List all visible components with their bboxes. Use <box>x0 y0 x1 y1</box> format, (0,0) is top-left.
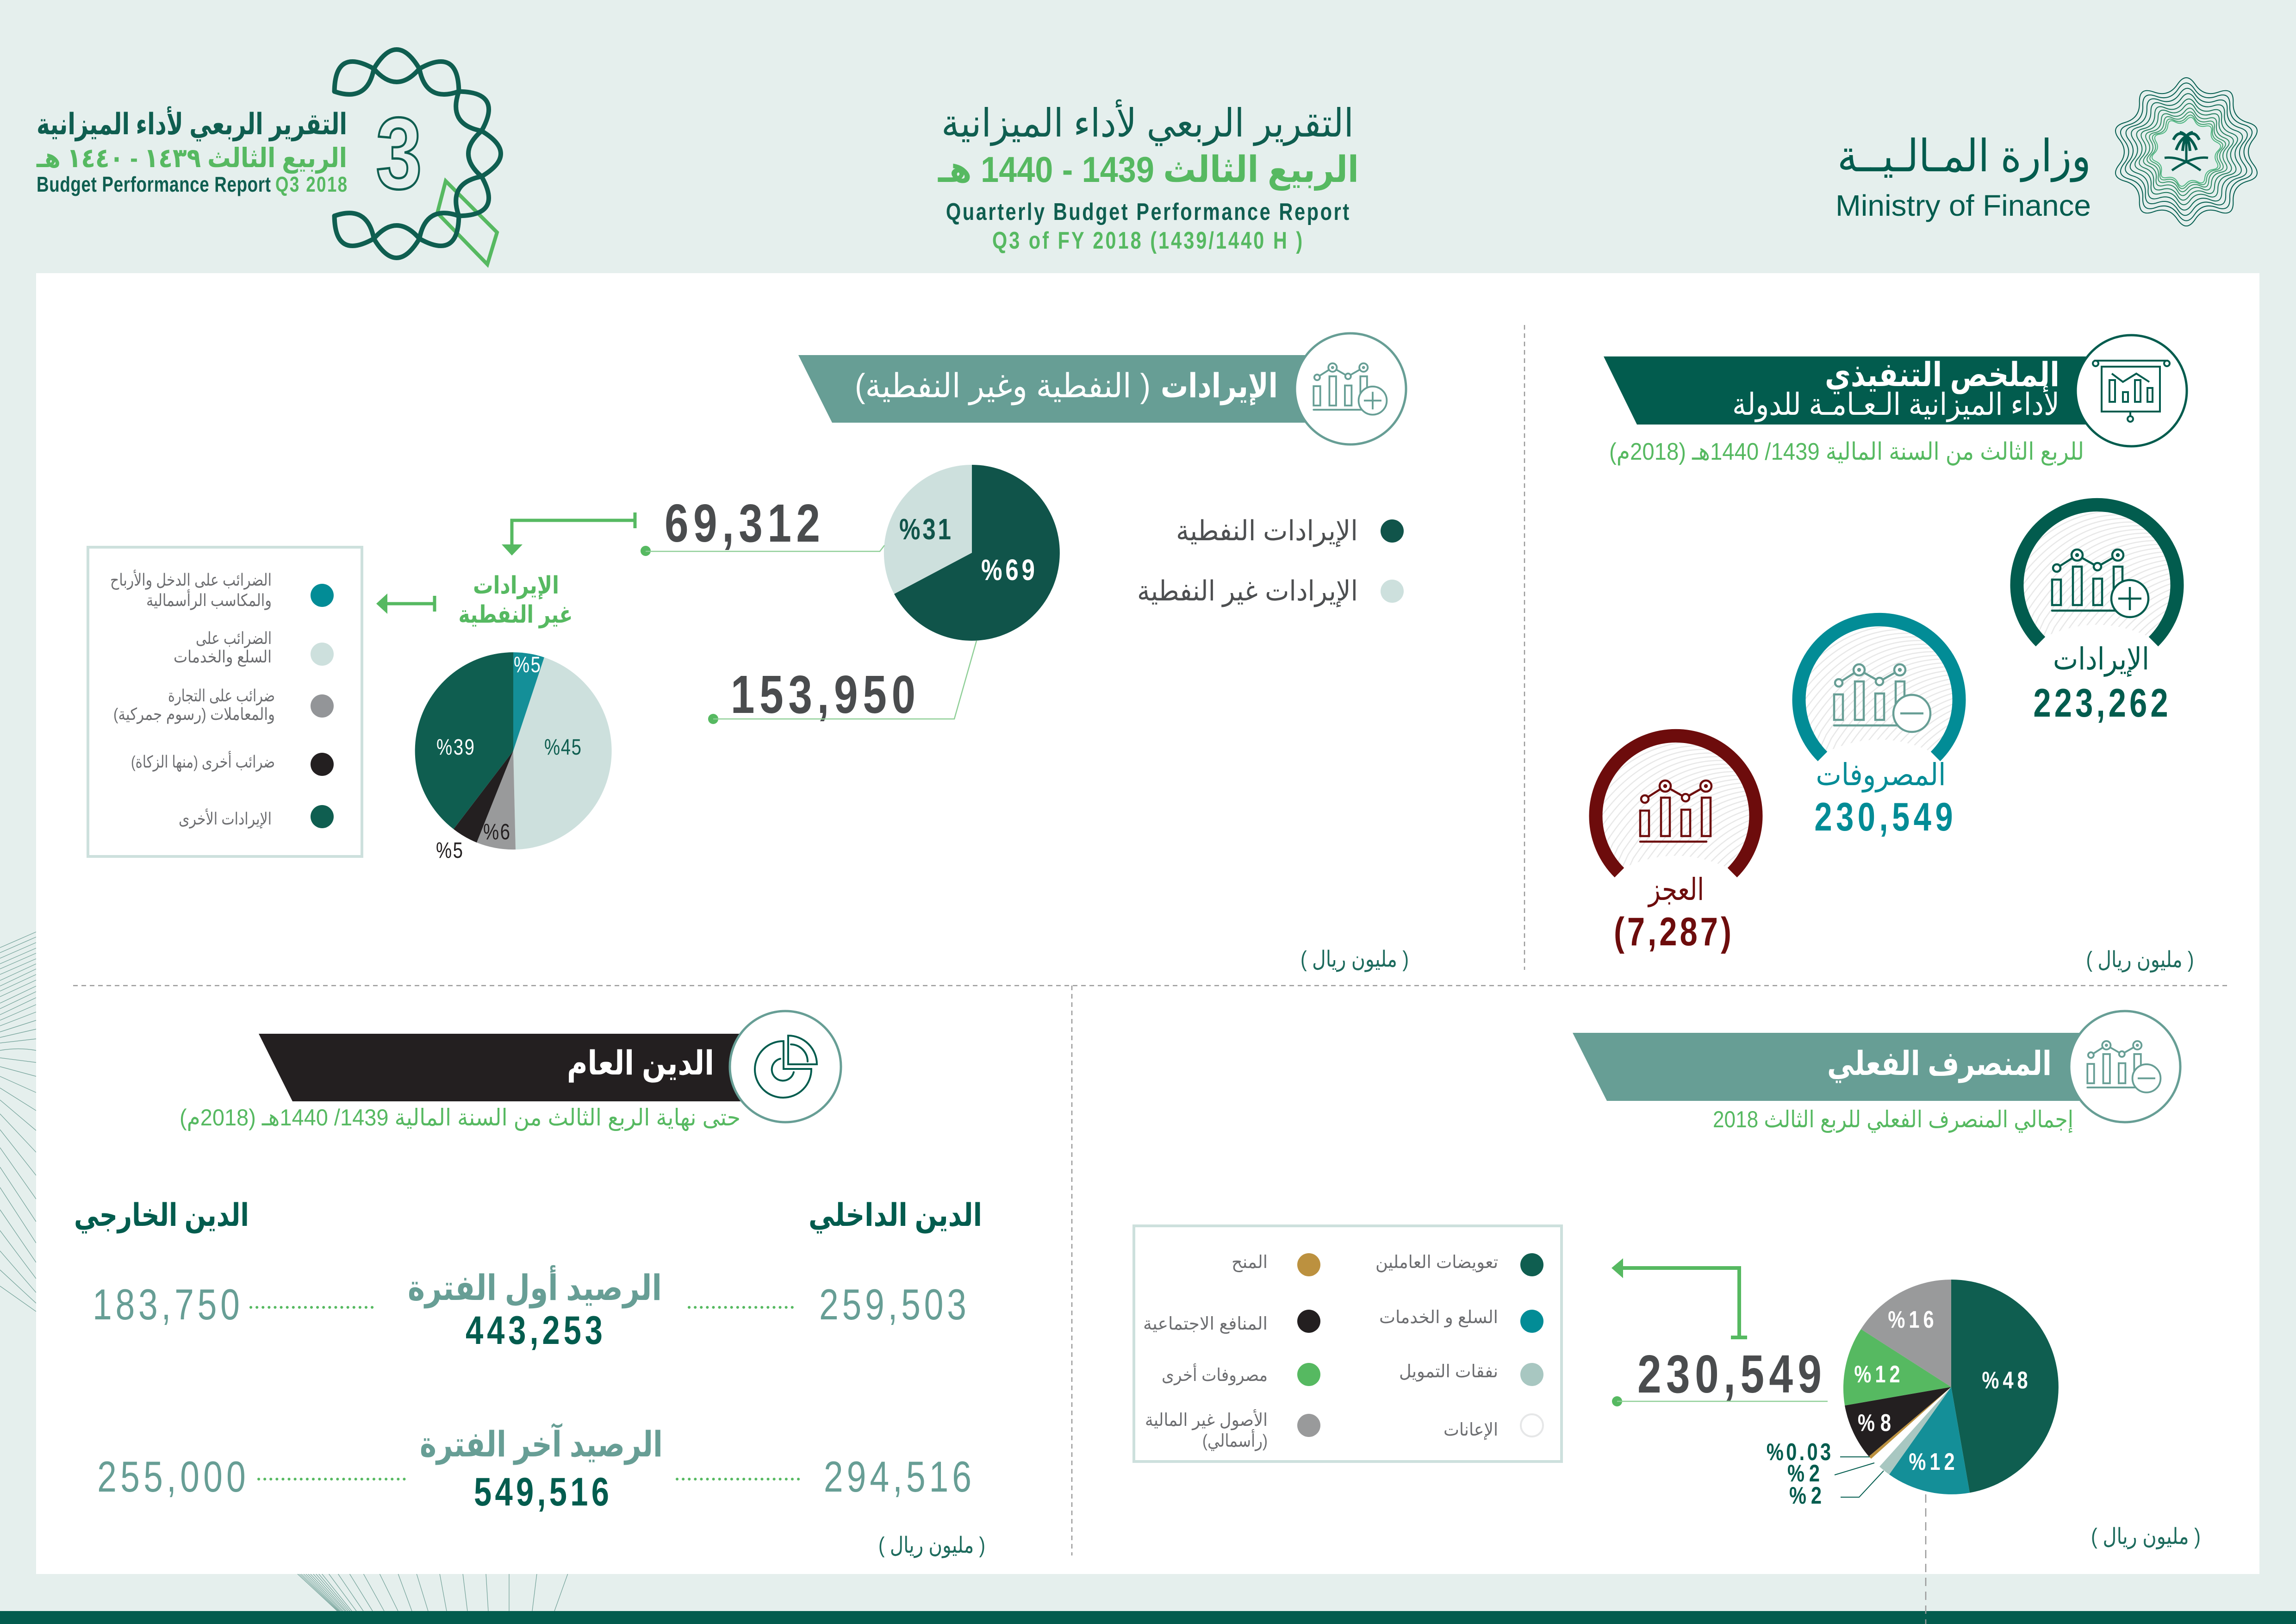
pie small-slice labels: %2 <box>1787 1460 1820 1487</box>
badge period: الربيع الثالث ١٤٣٩ - ١٤٤٠ هـ <box>36 143 347 174</box>
header band <box>1573 1033 2092 1101</box>
unit note: ( مليون ريال ) <box>2086 948 2194 973</box>
icon: deficit chart <box>1640 781 1711 842</box>
period arabic: الربيع الثالث 1439 - 1440 هـ <box>938 149 1359 191</box>
heading: non-oil revenues <box>458 572 573 629</box>
section title: الدين العام <box>567 1045 714 1083</box>
pie: expenditure breakdown: %16 <box>1888 1306 1934 1333</box>
callout: non-oil value <box>641 493 884 556</box>
icon: ministry emblem <box>2116 78 2257 226</box>
column heading: domestic debt: الدين الداخلي <box>809 1198 982 1234</box>
pie: non-oil breakdown: %39 <box>436 735 474 760</box>
icon: revenue chart plus <box>2052 550 2148 617</box>
section title: الإيرادات <box>1161 368 1278 406</box>
pie: non-oil breakdown: %6 <box>483 820 510 844</box>
gauge: expenditures: 230,549 <box>1814 795 1953 839</box>
legend: non-oil revenues: الإيرادات غير النفطية <box>1137 575 1358 607</box>
gauge: deficit: (7,287) <box>1614 910 1731 954</box>
badge english period: Q3 2018 <box>275 172 347 196</box>
panel: white content area <box>36 273 2259 1574</box>
ministry logo <box>1836 78 2257 226</box>
header band <box>798 355 1314 423</box>
gauge: deficit: العجز <box>1648 872 1704 907</box>
icon: expense chart <box>2069 1011 2180 1122</box>
period note: حتى نهاية الربع الثالث من السنة المالية 1439/ 1440هـ (2018م) <box>180 1105 740 1131</box>
section title: الملخص التنفيذي <box>1825 356 2060 394</box>
row: opening balance: 259,503 <box>819 1280 966 1329</box>
legend: expenditure categories: المنح <box>1232 1253 1268 1273</box>
icon: debt pie <box>730 1011 841 1122</box>
unit note: ( مليون ريال ) <box>2091 1524 2201 1549</box>
unit note: ( مليون ريال ) <box>1300 947 1409 972</box>
footer bar <box>0 1611 2296 1624</box>
gauge: revenues: الإيرادات <box>2053 642 2149 677</box>
pie: non-oil breakdown: %5 <box>436 838 463 863</box>
row: closing balance: 549,516 <box>474 1470 609 1514</box>
heading: non-oil revenues: غير النفطية <box>458 601 573 629</box>
legend: non-oil breakdown: ضرائب أخرى (منها الزكاة) <box>131 751 275 772</box>
section subtitle: لأداء الميزانية الـعـامـة للدولة <box>1732 385 2060 422</box>
row: closing balance: 255,000 <box>97 1453 246 1501</box>
icon: revenue chart <box>1295 333 1406 444</box>
row: closing balance: الرصيد آخر الفترة <box>420 1423 663 1465</box>
row: opening balance: 443,253 <box>466 1308 603 1353</box>
gauge: deficit <box>1589 729 1762 954</box>
legend: non-oil breakdown: السلع والخدمات <box>174 647 272 667</box>
unit note: ( مليون ريال ) <box>878 1533 985 1558</box>
legend: expenditure categories: الإعانات <box>1444 1420 1498 1440</box>
callout: oil value: 153,950 <box>731 665 915 725</box>
section subtitle: إجمالي المنصرف الفعلي للربع الثالث 2018 <box>1713 1106 2073 1133</box>
legend: expenditure categories: نفقات التمويل <box>1399 1362 1498 1382</box>
gauge: expenditures: المصروفات <box>1816 757 1946 793</box>
pie: expenditure breakdown: %8 <box>1858 1409 1891 1436</box>
header band <box>1604 356 2092 425</box>
header band <box>259 1034 750 1101</box>
badge title: التقرير الربعي لأداء الميزانية <box>37 106 347 142</box>
badge english: Budget Performance Report <box>37 172 271 196</box>
ministry name arabic: وزارة المـالـيــة <box>1837 131 2091 182</box>
title english: Quarterly Budget Performance Report <box>946 198 1349 225</box>
pie: expenditure breakdown <box>1843 1280 2059 1494</box>
ministry name english: Ministry of Finance <box>1836 189 2091 222</box>
period note: للربع الثالث من السنة المالية 1439/ 1440هـ (2018م) <box>1609 438 2084 466</box>
arrow: down to non-oil breakdown <box>502 512 635 556</box>
legend: expenditure categories: تعويضات العاملين <box>1375 1253 1498 1273</box>
section title qualifier: ( النفطية وغير النفطية) <box>855 368 1151 406</box>
pie: non-oil breakdown: %45 <box>544 735 581 760</box>
legend: expenditure categories: (رأسمالي) <box>1202 1429 1268 1451</box>
gauge: revenues <box>2010 498 2184 723</box>
icon: expense chart minus <box>1834 664 1930 732</box>
pie: expenditure breakdown: %48 <box>1982 1367 2028 1393</box>
gauge: expenditures <box>1792 613 1966 837</box>
legend: non-oil breakdown: والمعاملات (رسوم جمركية) <box>113 705 275 724</box>
legend: expenditure categories <box>1134 1226 1562 1462</box>
legend: non-oil breakdown: الضرائب على الدخل والأرباح <box>110 569 272 590</box>
pie: non-oil breakdown: %5 <box>514 653 541 677</box>
legend: expenditure categories: المنافع الاجتماعية <box>1143 1314 1268 1334</box>
panel: actual expenditure <box>1134 1011 2201 1549</box>
arrow: to legend <box>1612 1258 1747 1337</box>
callout: total expenditure: 230,549 <box>1637 1344 1822 1404</box>
icon: twisted wreath <box>335 50 501 258</box>
legend: non-oil breakdown: الإيرادات الأخرى <box>179 808 272 829</box>
row: closing balance: 294,516 <box>824 1453 971 1501</box>
pie: expenditure breakdown: %12 <box>1909 1448 1955 1475</box>
legend: oil revenues: الإيرادات النفطية <box>1176 515 1358 547</box>
pie small-slice labels: %0.03 <box>1767 1438 1831 1465</box>
arrow: left to legend <box>376 593 435 614</box>
title arabic: التقرير الربعي لأداء الميزانية <box>941 99 1354 146</box>
legend: expenditure categories: مصروفات أخرى <box>1162 1363 1268 1386</box>
pie small-slice labels: %2 <box>1789 1482 1822 1509</box>
pie: oil vs non-oil: %31 <box>899 513 951 546</box>
legend: non-oil breakdown: والمكاسب الرأسمالية <box>146 589 272 610</box>
row: opening balance: الرصيد أول الفترة <box>408 1265 662 1309</box>
pie: non-oil breakdown <box>415 652 612 863</box>
panel: public debt <box>74 1011 985 1558</box>
numeral 3: 3 <box>376 96 422 210</box>
report badge: Q3 wreath and title <box>36 50 501 264</box>
icon: presentation board <box>2076 335 2187 446</box>
callout: non-oil value: 69,312 <box>665 493 820 553</box>
panel: revenues <box>88 333 1409 972</box>
callout: oil value <box>708 641 977 725</box>
pie small-slice labels <box>1767 1438 1884 1509</box>
main title block <box>938 99 1359 254</box>
pie: oil vs non-oil: %69 <box>981 554 1035 587</box>
icon: green diamond <box>437 181 497 264</box>
legend: non-oil breakdown <box>88 547 362 856</box>
pie: oil vs non-oil <box>884 465 1060 641</box>
panel: executive summary <box>1506 335 2296 1056</box>
row: closing balance <box>97 1423 971 1514</box>
heading: non-oil revenues: الإيرادات <box>473 572 559 600</box>
legend: non-oil breakdown: ضرائب على التجارة <box>168 686 275 706</box>
section title: المنصرف الفعلي <box>1827 1045 2052 1083</box>
period english: Q3 of FY 2018 (1439/1440 H ) <box>992 227 1302 254</box>
row: opening balance: 183,750 <box>93 1280 240 1329</box>
legend: expenditure categories: الأصول غير المالية <box>1145 1409 1268 1430</box>
pie: expenditure breakdown: %12 <box>1854 1361 1900 1387</box>
column heading: external debt: الدين الخارجي <box>74 1198 249 1234</box>
row: opening balance <box>93 1265 966 1353</box>
gauge: revenues: 223,262 <box>2033 681 2168 725</box>
legend: non-oil breakdown: الضرائب على <box>196 629 272 648</box>
legend: expenditure categories: السلع و الخدمات <box>1379 1308 1498 1328</box>
